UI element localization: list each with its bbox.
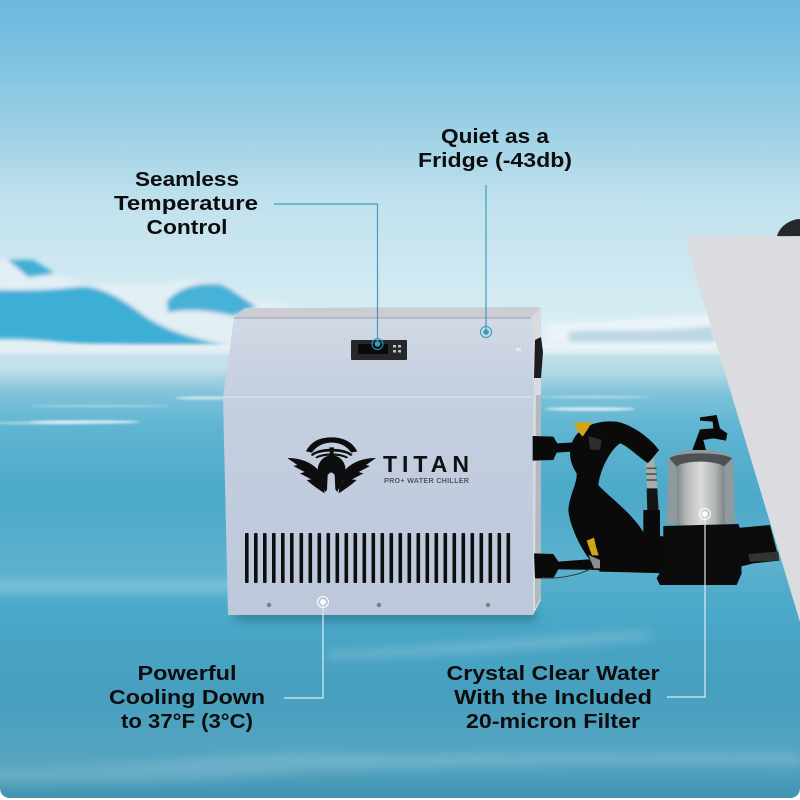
callout: seamless temperature control <box>114 168 383 350</box>
yellow valves <box>574 422 592 437</box>
right wing <box>339 458 376 493</box>
callout: powerful cooling: to 37°F (3°C) <box>121 710 253 733</box>
white panel at right <box>684 219 800 622</box>
callout: seamless temperature control: Seamless <box>135 168 239 191</box>
black hose <box>568 421 667 573</box>
bottom connector <box>534 553 602 578</box>
helmet <box>318 447 346 492</box>
lower panel <box>223 397 533 615</box>
callout: crystal clear water: 20-micron Filter <box>466 710 640 733</box>
callout: seamless temperature control: Control <box>146 216 228 239</box>
callout: quiet as a fridge: Quiet as a <box>441 125 550 148</box>
chiller unit <box>223 307 543 615</box>
filter base <box>657 524 742 585</box>
screws <box>267 603 490 607</box>
faucet <box>692 415 727 450</box>
callout: crystal clear water <box>446 508 710 733</box>
horizon ice band <box>0 339 800 354</box>
pump, hoses and filter <box>533 415 779 585</box>
brand name: TITAN <box>383 451 469 477</box>
control display <box>351 340 407 360</box>
shadow under chiller <box>236 610 536 620</box>
water reflections <box>0 360 800 785</box>
callout: crystal clear water: With the Included <box>454 686 652 709</box>
corrugated hose <box>646 457 657 488</box>
left wing <box>287 458 325 493</box>
callout: crystal clear water: Crystal Clear Water <box>446 662 660 685</box>
titan logo <box>287 437 470 493</box>
distant mountains <box>0 258 718 347</box>
side strip <box>531 308 541 615</box>
filter bowl <box>667 449 735 523</box>
callout: powerful cooling: Powerful <box>138 662 236 685</box>
top connector <box>533 436 595 461</box>
callout: powerful cooling <box>109 596 328 733</box>
callout: quiet as a fridge: Fridge (-43db) <box>418 149 572 172</box>
upper panel <box>223 318 534 397</box>
product name: PRO+ WATER CHILLER <box>384 476 470 485</box>
callout: seamless temperature control: Temperature <box>114 192 258 215</box>
vent slots <box>245 533 510 583</box>
lid <box>233 307 541 319</box>
sky background <box>0 0 800 345</box>
switch <box>534 337 543 378</box>
helmet crest <box>306 437 357 453</box>
callout: quiet as a fridge <box>418 125 572 338</box>
callout: powerful cooling: Cooling Down <box>109 686 265 709</box>
small label <box>516 348 521 351</box>
sea <box>0 350 800 800</box>
outlet pipe <box>733 525 779 568</box>
